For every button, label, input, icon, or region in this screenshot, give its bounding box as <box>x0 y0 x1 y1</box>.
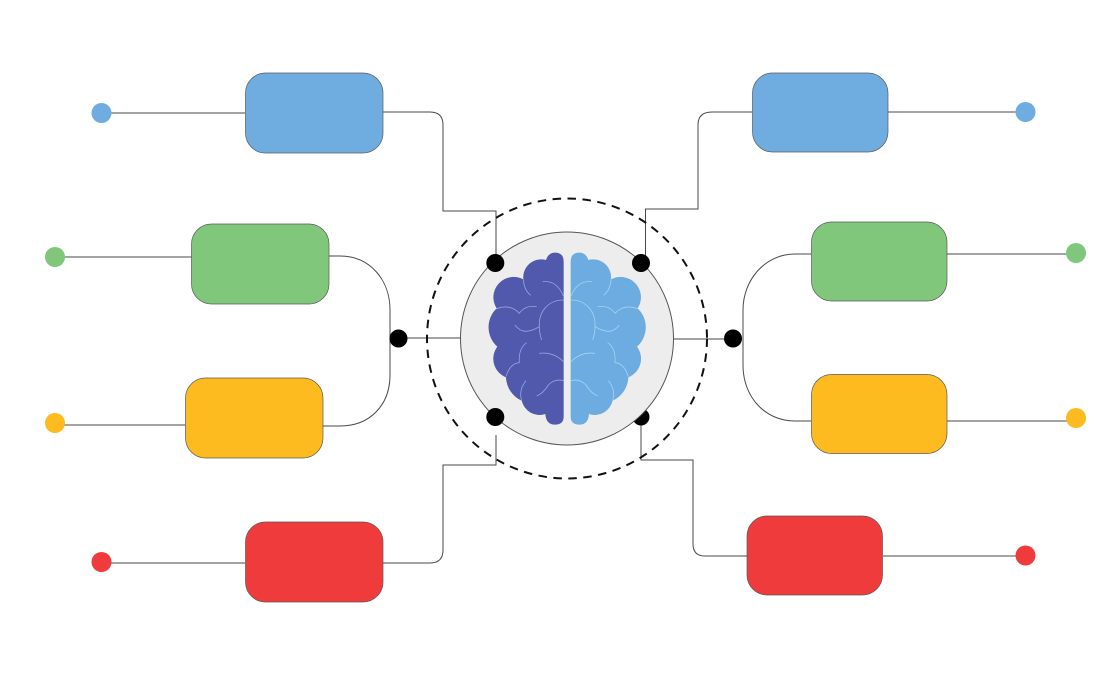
box: bottom right red <box>747 516 882 595</box>
box: top left blue <box>246 73 383 153</box>
box: top right blue <box>752 73 888 152</box>
brain disc <box>460 232 674 445</box>
icon: brain <box>489 253 646 425</box>
node: top right <box>632 254 650 272</box>
node: bottom left <box>486 408 504 426</box>
dot: bottom right red <box>1016 546 1036 566</box>
box: bottom left red <box>246 522 383 602</box>
connector: top left box to brain <box>101 112 496 263</box>
node: top left <box>486 254 504 272</box>
dot: bottom left red <box>92 552 112 572</box>
dot: lower left yellow <box>45 413 65 433</box>
box: lower left yellow <box>186 378 323 458</box>
dot: lower right yellow <box>1066 408 1086 428</box>
box: middle left green <box>192 224 329 304</box>
box: middle right green <box>812 222 947 301</box>
dashed ring <box>427 198 707 478</box>
dot: middle right green <box>1066 243 1086 263</box>
left hemisphere <box>489 253 564 425</box>
dot: middle left green <box>45 247 65 267</box>
node: left hub <box>390 330 408 348</box>
node: right hub <box>724 330 742 348</box>
right hemisphere <box>571 253 646 425</box>
connector: bottom left box to brain <box>101 435 496 563</box>
node: bottom right <box>632 408 650 426</box>
connector: top right box to brain <box>646 112 1025 263</box>
connector: green and yellow right boxes to hub <box>674 254 1076 421</box>
connector: bottom right box to brain <box>641 417 1025 556</box>
dot: top left blue <box>92 103 112 123</box>
box: lower right yellow <box>812 374 947 454</box>
connector: green and yellow left boxes to hub <box>55 256 461 426</box>
dot: top right blue <box>1016 102 1036 122</box>
